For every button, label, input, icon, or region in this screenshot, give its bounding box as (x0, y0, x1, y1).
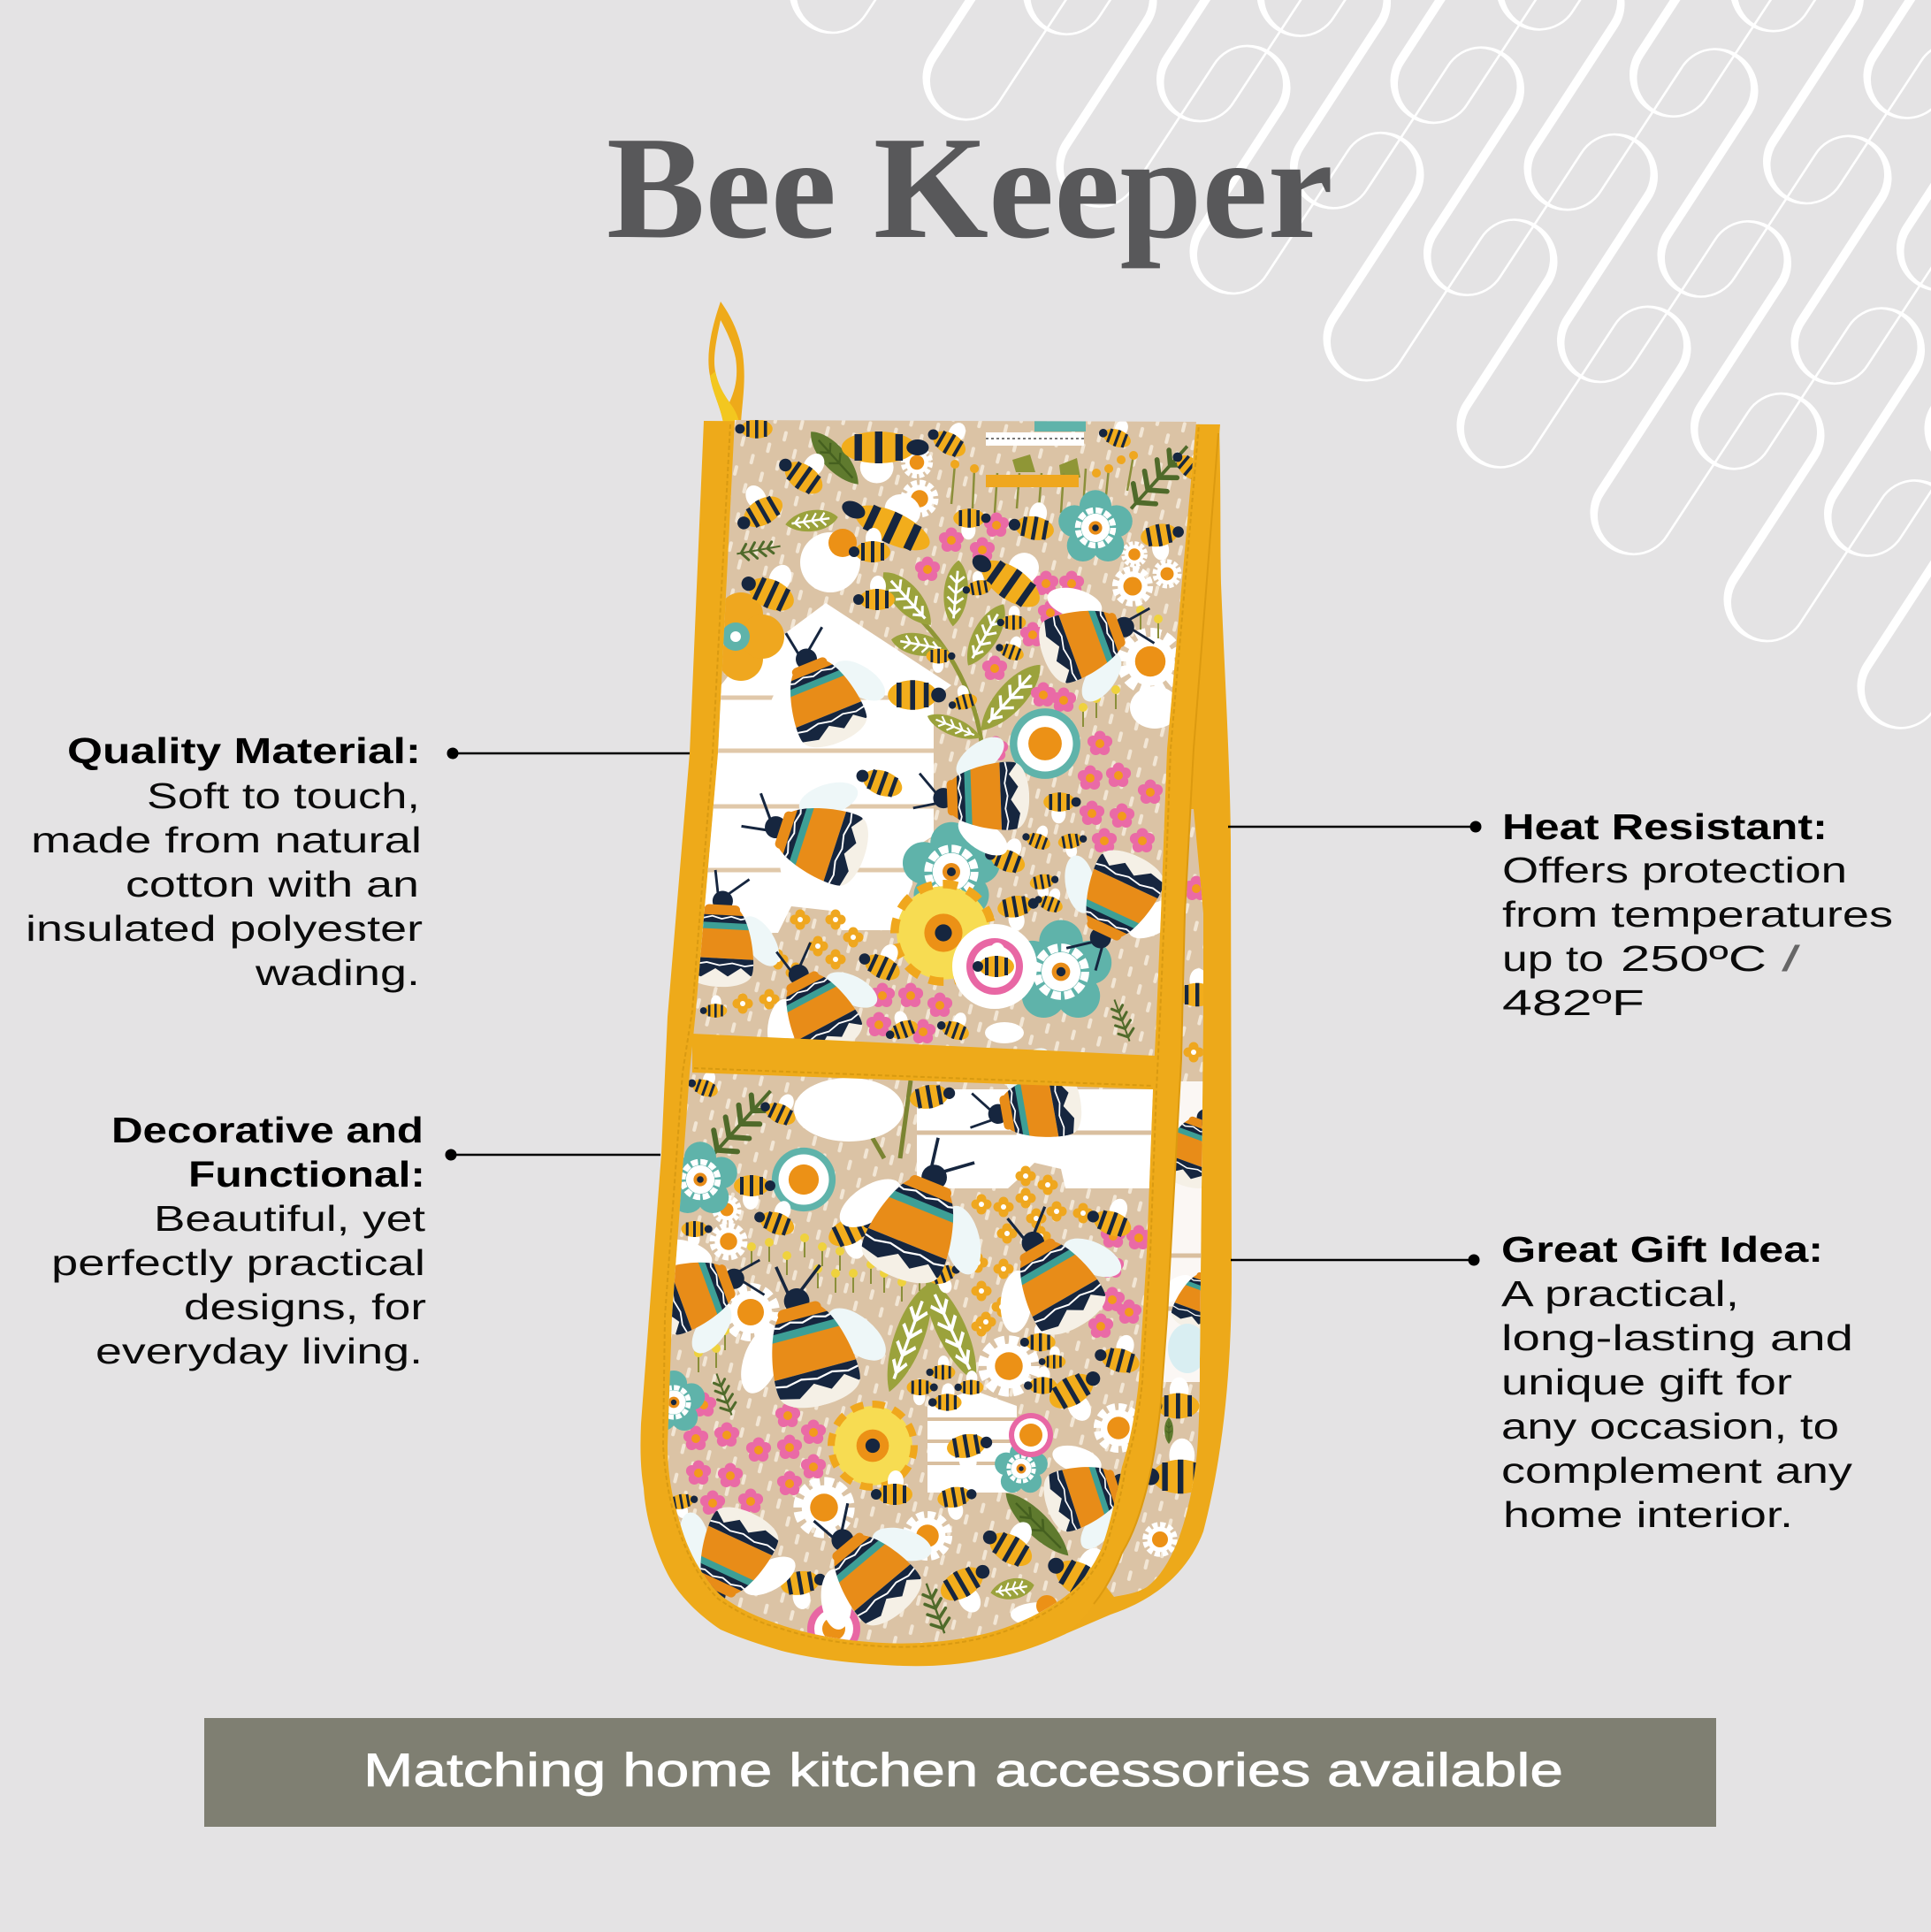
callout: quality material (26, 730, 690, 993)
hanging loop (708, 302, 744, 423)
stitching (663, 424, 1199, 1647)
text: heat resistant body: up to (1502, 938, 1604, 979)
large flowers (643, 490, 1133, 1655)
text: heat resistant body (1502, 850, 1893, 1023)
text: heat resistant body: 250ºC (1621, 938, 1767, 979)
large bees (619, 554, 1207, 1669)
text: quality material body: cotton with an (126, 864, 419, 905)
text: decorative body: everyday living. (95, 1331, 423, 1371)
tulip strip (951, 455, 1133, 513)
pocket strap (692, 1034, 1156, 1089)
daisies (713, 449, 1179, 1627)
heading: decorative and functional: Decorative and (111, 1110, 424, 1150)
connector: decorative (446, 1149, 660, 1160)
text: decorative body: perfectly practical (51, 1242, 425, 1283)
callout: decorative and functional (51, 1110, 660, 1371)
white hive upper (702, 603, 951, 933)
text: heat resistant body: from temperatures (1502, 894, 1893, 935)
heading: quality material: Quality Material: (67, 730, 421, 771)
printed label scrap (986, 421, 1086, 446)
banner text: Matching home kitchen accessories available (363, 1745, 1563, 1797)
heading: great gift idea: Great Gift Idea: (1501, 1229, 1823, 1270)
white hive small (927, 1390, 1017, 1493)
connector: heat resistant (1228, 821, 1482, 833)
text: great gift idea body: home interior. (1503, 1494, 1793, 1535)
text: great gift idea body: A practical, (1501, 1273, 1739, 1314)
pink flowers (683, 513, 1163, 1515)
title: Bee Keeper (607, 106, 1333, 269)
text: decorative body (51, 1198, 426, 1371)
text: great gift idea body: long-lasting and (1501, 1317, 1853, 1358)
text: quality material body: wading. (255, 952, 420, 993)
text: quality material body: insulated polyester (26, 908, 423, 949)
text: heat resistant body: / (1782, 938, 1801, 979)
front panel fabric (668, 420, 1196, 1644)
text: decorative body: designs, for (184, 1287, 426, 1327)
decorative link pattern (789, 0, 1931, 729)
text: great gift idea body: complement any (1501, 1450, 1853, 1491)
text: heat resistant body: 482ºF (1502, 982, 1645, 1023)
orange clover clusters (732, 909, 1093, 1337)
yellow bud field (694, 606, 1163, 1372)
text: decorative body: Beautiful, yet (154, 1198, 426, 1239)
callout: great gift idea (1231, 1229, 1853, 1535)
text: quality material body (26, 775, 423, 993)
text: quality material body: Soft to touch, (147, 775, 420, 816)
white hive lower (917, 1089, 1158, 1188)
connector: quality material (447, 748, 690, 759)
heading: heat resistant: Heat Resistant: (1502, 806, 1828, 847)
heading: decorative and functional: Functional: (188, 1154, 425, 1195)
callout: heat resistant (1228, 806, 1893, 1023)
banner (204, 1718, 1716, 1827)
front panel binding (640, 421, 1220, 1666)
connector: great gift idea (1231, 1254, 1480, 1266)
back panel fabric (1107, 809, 1203, 1597)
text: great gift idea body: any occasion, to (1501, 1406, 1839, 1447)
text: quality material body: made from natural (31, 820, 422, 860)
text: heat resistant body: Offers protection (1502, 850, 1847, 890)
heading: decorative and functional (111, 1110, 425, 1195)
text: great gift idea body: unique gift for (1501, 1362, 1792, 1402)
oven glove product photo (619, 302, 1266, 1669)
text: great gift idea body (1501, 1273, 1853, 1535)
leaves and ferns (699, 424, 1198, 1637)
front binding edge shadow (1094, 433, 1218, 1604)
back panel binding (1061, 424, 1232, 1636)
small bees (668, 408, 1217, 1623)
